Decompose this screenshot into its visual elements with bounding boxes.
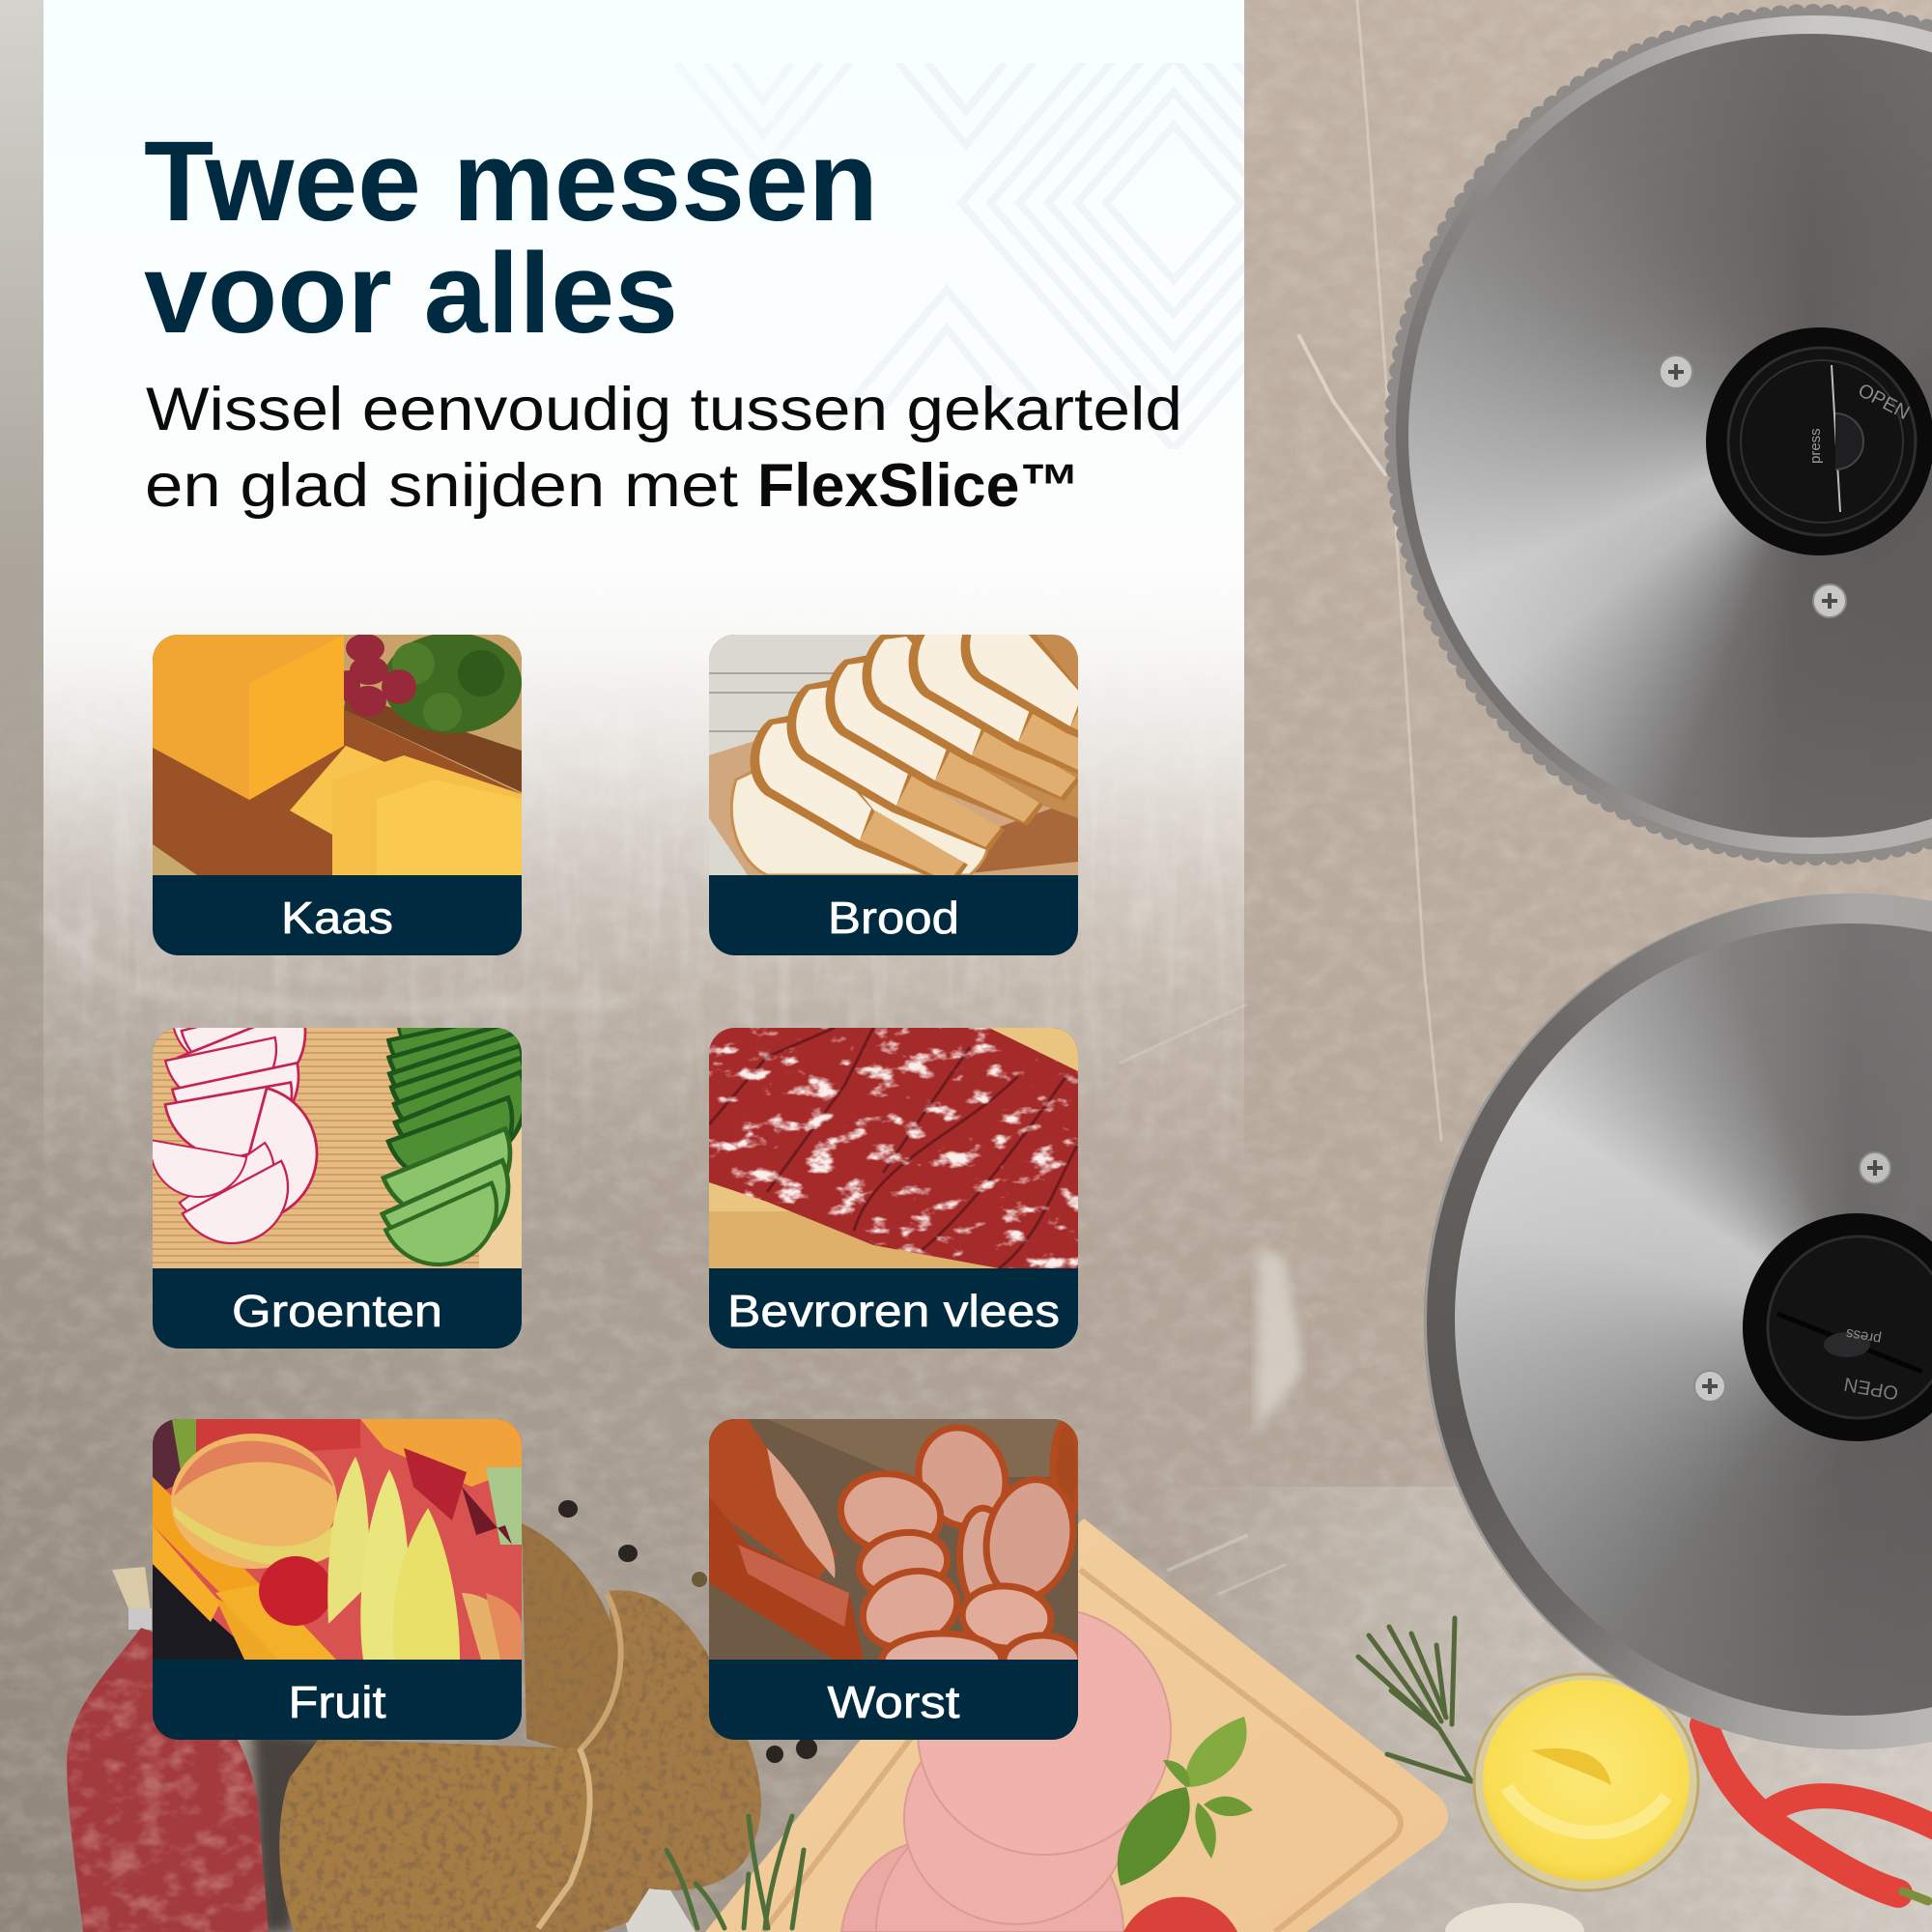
icon: basil bbox=[1118, 1717, 1253, 1886]
icon: rosemary right bbox=[1358, 1618, 1471, 1781]
blade scalloped edge bbox=[1384, 4, 1932, 866]
marble veins bbox=[48, 0, 1441, 1594]
subtitle: Wissel eenvoudig tussen gekarteld bbox=[146, 376, 1182, 443]
decorative geometric pattern bbox=[829, 63, 1244, 449]
blade outer ring bbox=[1396, 15, 1932, 854]
bread slices bbox=[279, 1523, 761, 1932]
image: fruit platter bbox=[153, 1419, 522, 1660]
label: Groenten bbox=[232, 1286, 442, 1336]
striped cloth bbox=[618, 1884, 696, 1932]
label: Fruit bbox=[288, 1677, 386, 1727]
image: radish and cucumber bbox=[153, 1028, 522, 1268]
label: Worst bbox=[827, 1677, 960, 1727]
peppercorns bbox=[558, 1500, 817, 1763]
image: cheese bbox=[153, 635, 522, 875]
chilli peppers bbox=[1704, 1725, 1932, 1901]
label: Brood bbox=[828, 893, 959, 943]
icon: rosemary bottom bbox=[667, 1816, 804, 1928]
subtitle bbox=[145, 376, 1182, 520]
card: Kaas bbox=[153, 635, 522, 955]
title bbox=[144, 118, 878, 357]
blade hub and screws: press bbox=[1845, 1325, 1883, 1348]
blade hub and screws bbox=[1661, 327, 1932, 618]
image: sliced sausage bbox=[709, 1419, 1078, 1660]
card: Brood bbox=[709, 635, 1078, 955]
blade: serrated (top) bbox=[1384, 4, 1932, 866]
cutting board bbox=[705, 1519, 1448, 1932]
subtitle: FlexSlice™ bbox=[757, 452, 1080, 520]
card: Fruit bbox=[153, 1419, 522, 1740]
card: Bevroren vlees bbox=[709, 1028, 1078, 1349]
blade hub and screws: OPEN bbox=[1855, 380, 1913, 424]
blade polished plate bbox=[1455, 923, 1932, 1716]
tomato bbox=[1123, 1897, 1237, 1932]
subtitle: en glad snijden met bbox=[145, 452, 739, 520]
image: sliced meat bbox=[709, 1028, 1078, 1268]
blade hub and screws: press bbox=[1807, 428, 1824, 464]
blade hub and screws: OPEN bbox=[1842, 1373, 1900, 1404]
title: Twee messen bbox=[144, 118, 878, 245]
ham slices bbox=[841, 1607, 1171, 1932]
panel: white fading header panel bbox=[43, 0, 1244, 1148]
card: Worst bbox=[709, 1419, 1078, 1740]
blade polished plate bbox=[1408, 34, 1932, 838]
mustard bowl bbox=[1474, 1674, 1698, 1890]
dark cast shadow beside salami bbox=[253, 1729, 333, 1932]
label: Kaas bbox=[281, 893, 393, 943]
image: bread bbox=[709, 635, 1078, 875]
garlic bbox=[1445, 1903, 1584, 1932]
label: Bevroren vlees bbox=[727, 1286, 1060, 1336]
title: voor alles bbox=[144, 230, 678, 357]
marble blotch bbox=[1256, 1249, 1302, 1432]
salami bbox=[67, 1567, 269, 1932]
blade outer ring bbox=[1424, 894, 1932, 1749]
blade brushed texture bbox=[1455, 923, 1932, 1716]
blade brushed texture bbox=[1408, 34, 1932, 838]
card: Groenten bbox=[153, 1028, 522, 1349]
